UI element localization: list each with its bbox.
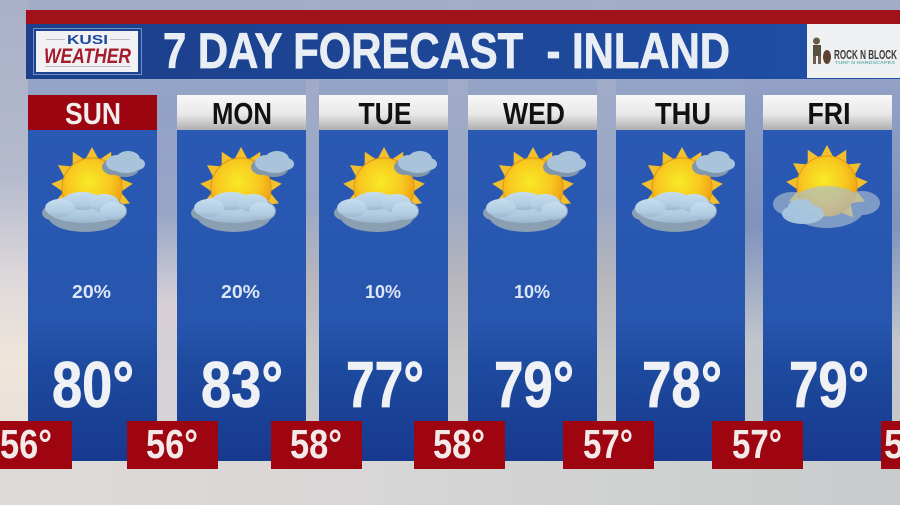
low: Friday bbox=[712, 421, 803, 469]
high temperature: 79° bbox=[494, 348, 574, 421]
high temperature: 77° bbox=[346, 348, 424, 421]
day header: SUN bbox=[65, 96, 121, 131]
day header bbox=[28, 95, 157, 131]
icon: partly cloudy bbox=[334, 147, 437, 232]
day header bbox=[616, 95, 745, 131]
sponsor logo: TURF N HARDSCAPES bbox=[835, 60, 895, 65]
day header: THU bbox=[655, 96, 711, 131]
high temperature: 78° bbox=[642, 348, 722, 421]
KUSI Weather logo: WEATHER bbox=[44, 44, 131, 68]
precipitation chance: 20% bbox=[72, 282, 111, 302]
high temperature: 83° bbox=[201, 348, 283, 421]
low: Thursday: 57° bbox=[583, 421, 633, 467]
low: Wednesday: 58° bbox=[433, 421, 485, 467]
panel: Tuesday bbox=[319, 95, 448, 461]
precipitation chance: 20% bbox=[221, 282, 260, 302]
icon: partly cloudy bbox=[632, 147, 735, 232]
high temperature: 80° bbox=[52, 348, 134, 421]
panel: Friday bbox=[763, 95, 892, 461]
icon: sun behind translucent clouds bbox=[773, 145, 880, 228]
day header: FRI bbox=[808, 96, 850, 131]
low: Thursday bbox=[563, 421, 654, 469]
precipitation chance: 10% bbox=[514, 282, 550, 302]
day header: WED bbox=[503, 96, 565, 131]
low: Tuesday bbox=[271, 421, 362, 469]
low temperature badges bbox=[0, 421, 900, 469]
low: Friday: 57° bbox=[732, 421, 782, 467]
icon: partly cloudy bbox=[191, 147, 294, 232]
panel: Monday bbox=[177, 95, 306, 461]
panel: Sunday bbox=[28, 95, 157, 461]
precipitation chance: 10% bbox=[365, 282, 401, 302]
low: Sunday: 56° bbox=[0, 421, 52, 467]
title: 7 DAY FORECAST - INLAND bbox=[163, 23, 730, 79]
panel: Wednesday bbox=[468, 95, 597, 461]
KUSI Weather logo bbox=[34, 28, 142, 74]
icon: partly cloudy bbox=[483, 147, 586, 232]
day header: MON bbox=[212, 96, 272, 131]
low: Tuesday: 58° bbox=[290, 421, 342, 467]
day header bbox=[319, 95, 448, 131]
high temperature: 79° bbox=[789, 348, 869, 421]
low: Monday: 56° bbox=[146, 421, 198, 467]
day header bbox=[763, 95, 892, 131]
red top stripe bbox=[26, 10, 900, 24]
panel: Thursday bbox=[616, 95, 745, 461]
day header: TUE bbox=[358, 96, 412, 131]
low: Wednesday bbox=[414, 421, 505, 469]
title banner bbox=[26, 10, 900, 79]
sponsor logo bbox=[807, 24, 900, 78]
day header bbox=[177, 95, 306, 131]
blue title bar bbox=[26, 24, 900, 79]
low: Monday bbox=[127, 421, 218, 469]
day header bbox=[468, 95, 597, 131]
icon: partly cloudy bbox=[42, 147, 145, 232]
KUSI Weather logo: KUSI bbox=[67, 32, 108, 47]
